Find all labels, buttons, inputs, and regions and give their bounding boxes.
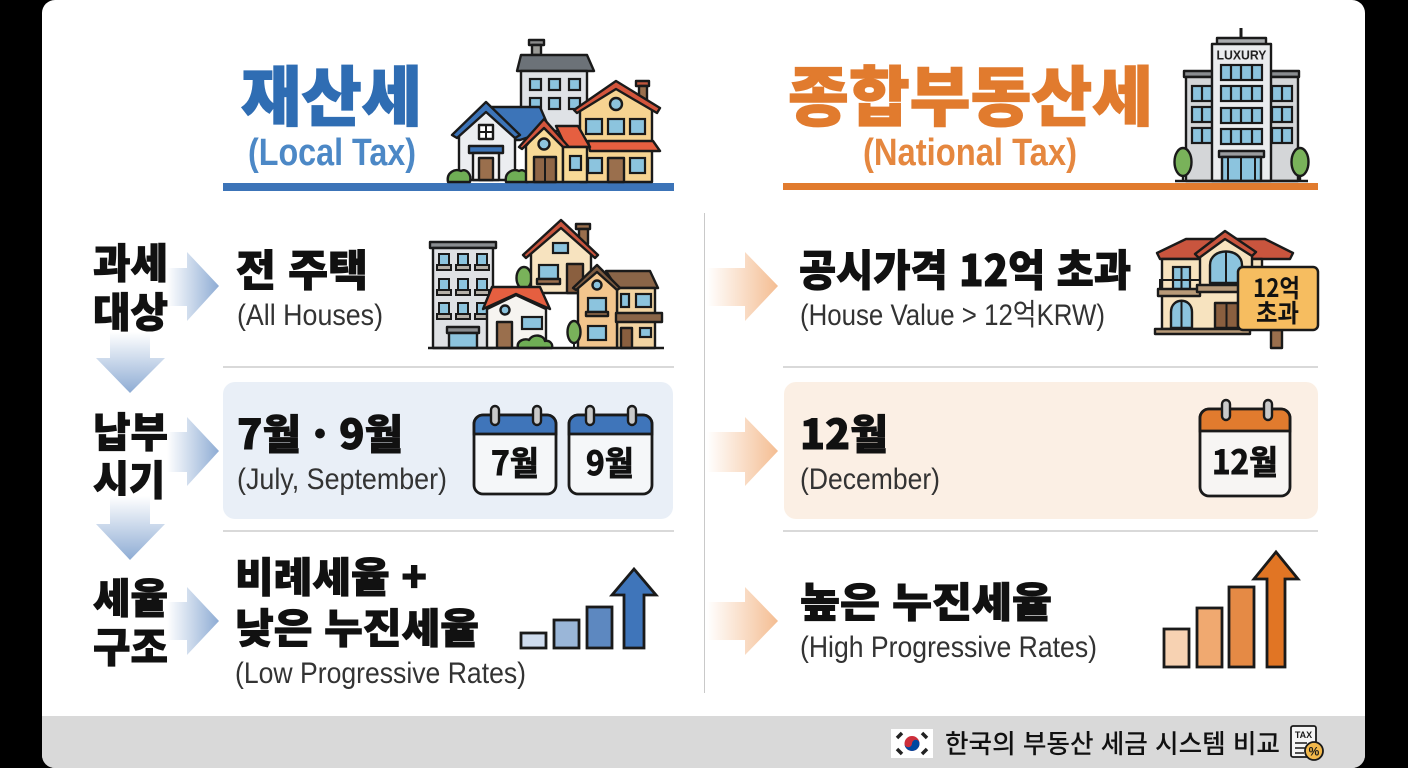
icon: calendar July <box>474 406 556 494</box>
row 1 right text <box>799 237 1131 332</box>
arrow: right column row 3 <box>707 587 778 655</box>
row label: 납부 시기: 시기 <box>93 447 165 507</box>
row 2 left text <box>237 401 447 496</box>
row 3 left text: 낮은 누진세율 <box>235 595 479 655</box>
panel: left row 2 highlight <box>223 382 673 519</box>
footer bar <box>42 716 1365 768</box>
panel: center divider <box>704 213 705 693</box>
heading: local tax: (Local Tax) <box>248 132 416 174</box>
row divider left 2 <box>223 530 674 532</box>
heading: national tax: (National Tax) <box>863 132 1077 174</box>
footer text: 한국의 부동산 세금 시스템 비교 <box>945 724 1280 761</box>
row label: 납부 시기 <box>93 399 219 507</box>
icon: tax document: TAX <box>1295 730 1312 740</box>
row 2 right text: (December) <box>800 463 940 496</box>
row 3 left text <box>235 544 526 690</box>
icon: calendar July: 7월 <box>491 437 539 485</box>
row 3 right text <box>800 569 1097 664</box>
heading: local tax: 재산세 <box>241 45 422 139</box>
arrow: down 2 <box>96 496 165 560</box>
icon: mixed housing <box>428 220 664 348</box>
icon: tax document: % <box>1309 744 1320 758</box>
row 1 left text: (All Houses) <box>237 299 383 332</box>
row 1 right text: (House Value > 12억KRW) <box>800 299 1105 332</box>
row 3 right text: 높은 누진세율 <box>800 569 1052 629</box>
arrow: row 2 right <box>167 417 219 486</box>
icon: tax document <box>1291 726 1323 760</box>
icon: calendar December <box>1200 400 1290 496</box>
icon: calendar September: 9월 <box>586 437 634 485</box>
row 2 right text: 12월 <box>800 401 888 461</box>
arrow: right column row 2 <box>707 417 778 486</box>
chart: high progressive bars <box>1164 552 1298 667</box>
arrow: right column row 1 <box>707 252 778 321</box>
icon: luxury tower: LUXURY <box>1216 48 1267 62</box>
row 3 left text: 비례세율 + <box>235 544 427 604</box>
row 3 left text: (Low Progressive Rates) <box>235 657 526 690</box>
row divider left 1 <box>223 366 674 368</box>
row 1 left text: 전 주택 <box>236 237 368 299</box>
icon: calendar September <box>569 406 652 494</box>
row 3 right text: (High Progressive Rates) <box>800 631 1097 664</box>
row label: 세율 구조 <box>93 565 219 674</box>
row divider right 1 <box>783 366 1318 368</box>
row divider right 2 <box>783 530 1318 532</box>
icon: luxury tower <box>1174 28 1308 181</box>
arrow: row 3 right <box>167 587 219 655</box>
arrow: row 1 right <box>167 252 219 321</box>
icon: calendar December: 12월 <box>1212 436 1278 484</box>
icon: houses group <box>448 40 660 182</box>
icon: villa with sign <box>1155 231 1318 348</box>
row label: 세율 구조: 세율 <box>93 565 168 625</box>
chart: low progressive bars <box>521 569 656 648</box>
heading: national tax: 종합부동산세 <box>788 45 1153 139</box>
row 2 left text: 7월 · 9월 <box>237 401 403 461</box>
row 1 left text <box>236 237 383 332</box>
icon: villa with sign: 초과 <box>1256 294 1299 330</box>
heading rule: national tax <box>783 183 1318 190</box>
panel: right row 2 highlight <box>784 382 1318 519</box>
row label: 과세 대상: 과세 <box>93 230 168 290</box>
row 2 left text: (July, September) <box>237 463 447 496</box>
row 1 right text: 공시가격 12억 초과 <box>799 237 1131 299</box>
row label: 과세 대상: 대상 <box>93 279 168 339</box>
heading rule: local tax <box>223 183 674 191</box>
icon: Korean flag <box>891 729 933 758</box>
arrow: down 1 <box>96 332 165 393</box>
row label: 세율 구조: 구조 <box>93 614 168 674</box>
row label: 납부 시기: 납부 <box>93 399 168 459</box>
row label: 과세 대상 <box>93 230 219 339</box>
icon: villa with sign: 12억 <box>1253 269 1300 305</box>
row 2 right text <box>800 401 940 496</box>
